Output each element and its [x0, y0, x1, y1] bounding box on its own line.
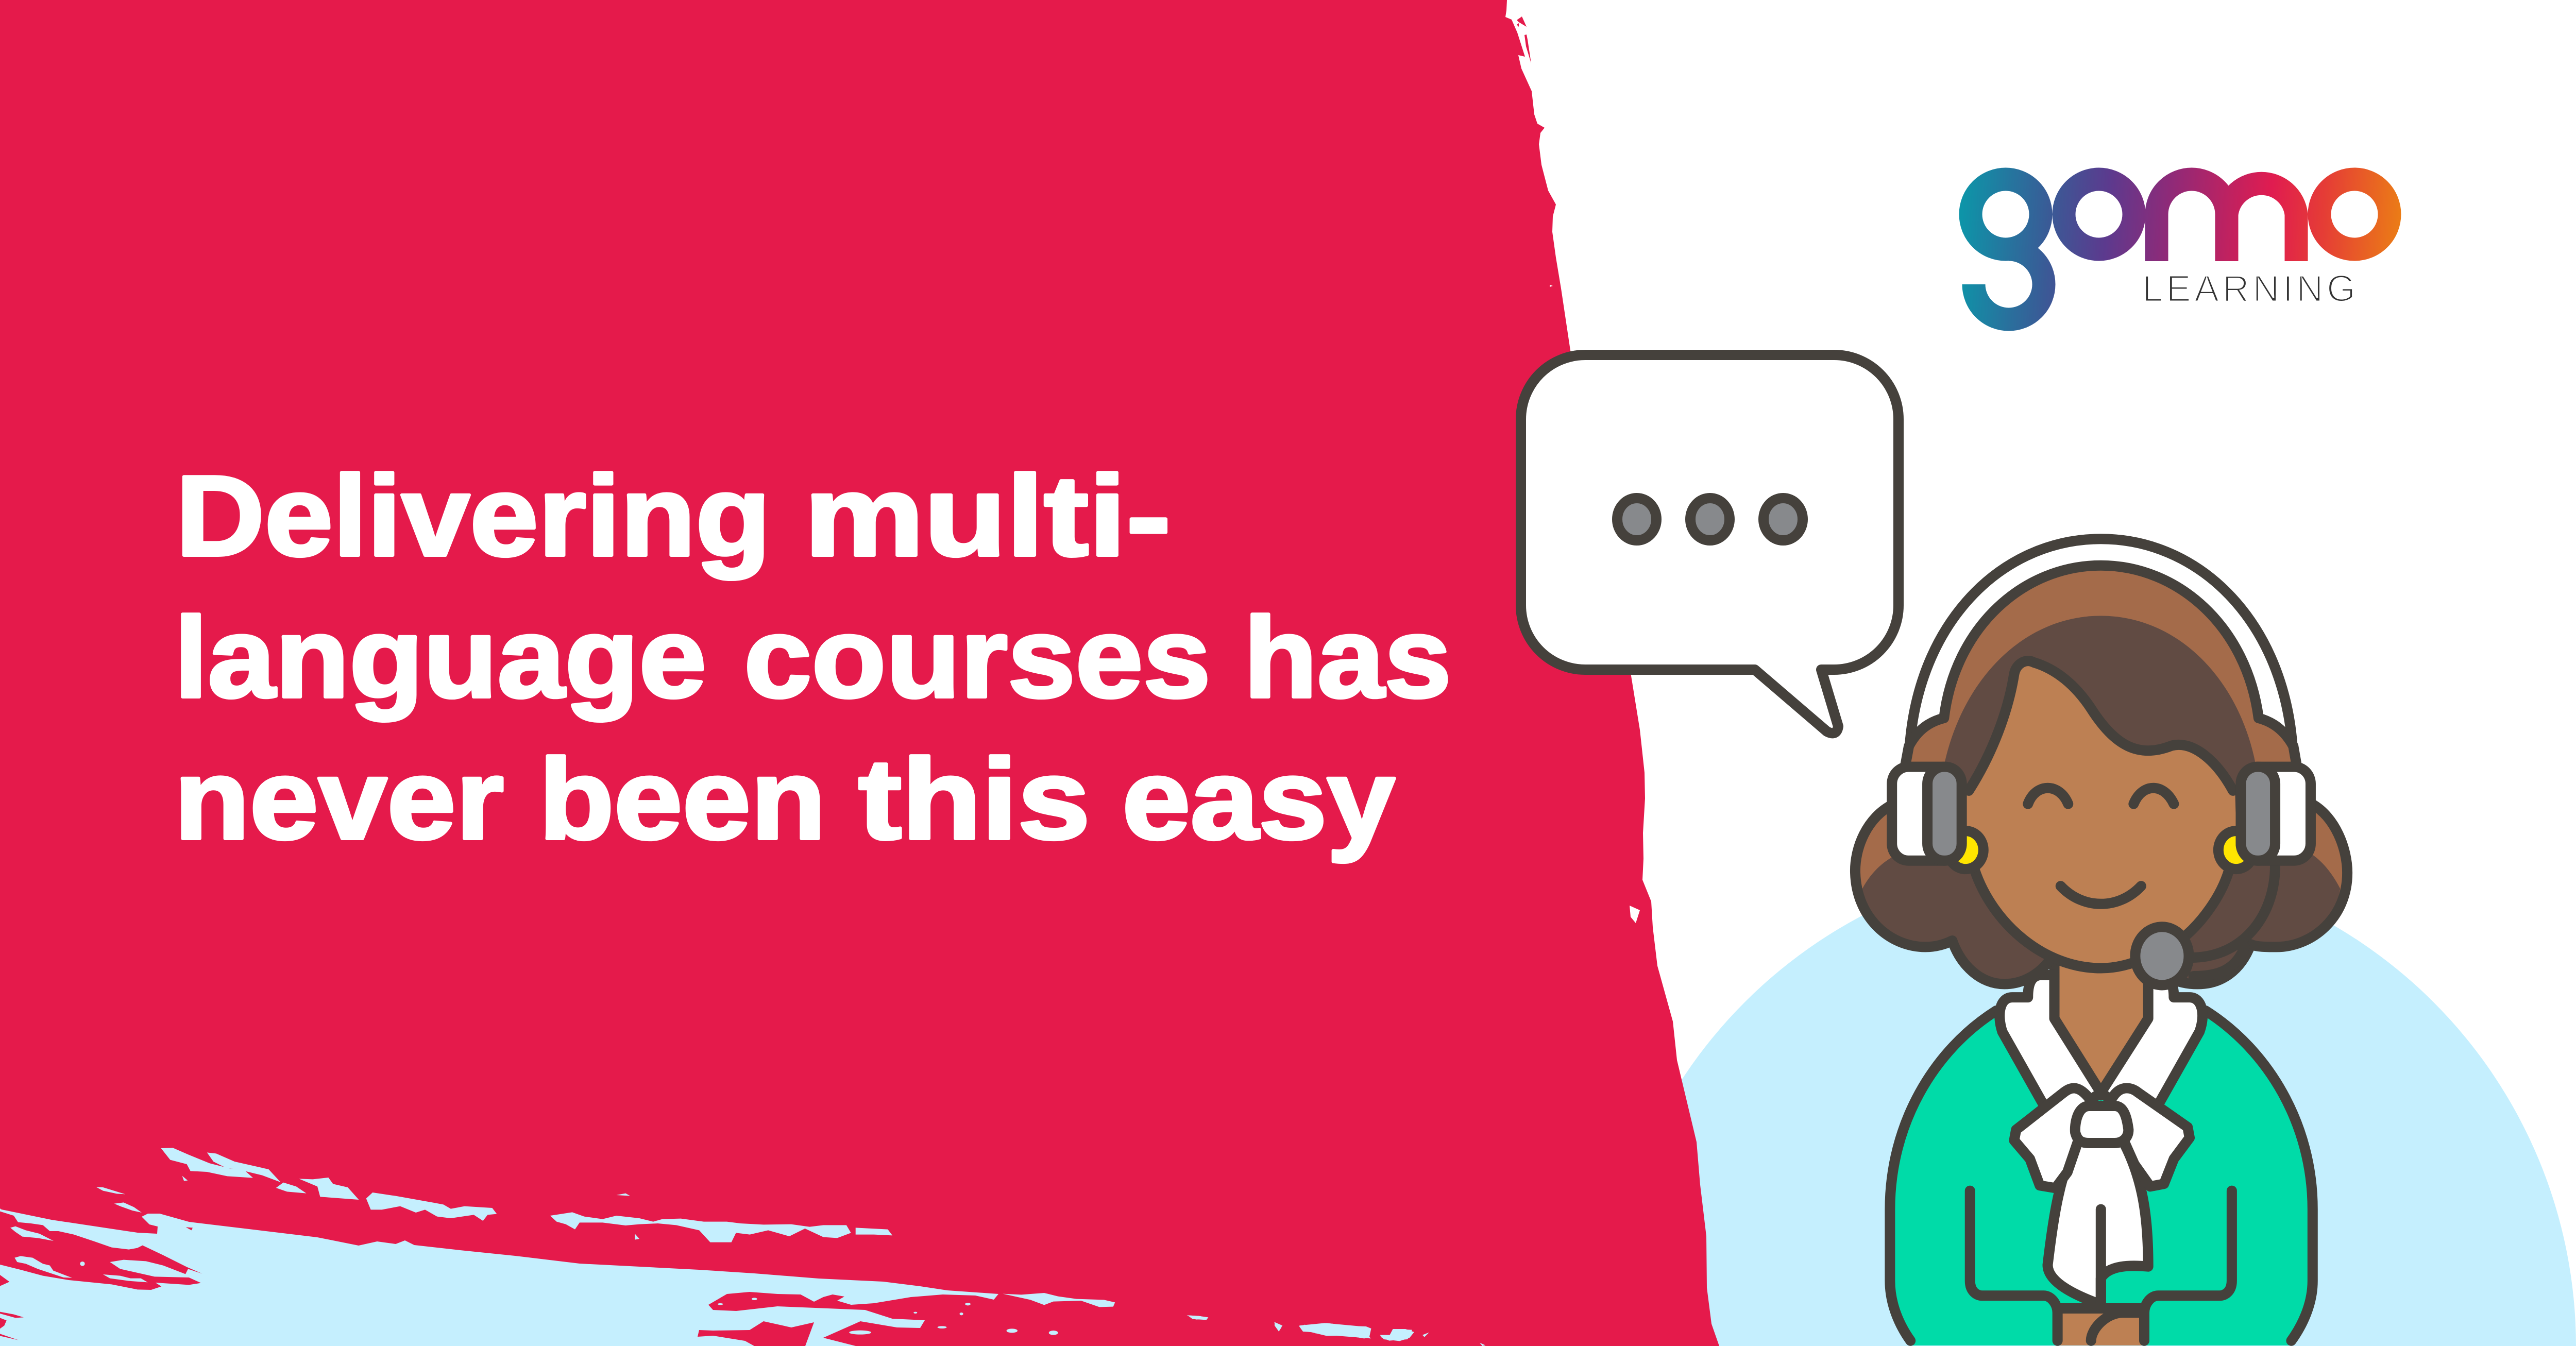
- headline: Delivering: [176, 452, 771, 580]
- tie centre line: [2096, 1209, 2106, 1305]
- headline: this: [858, 736, 1090, 863]
- hair back outline: [1855, 804, 2347, 984]
- dark front hair: [1943, 616, 2257, 812]
- headline: language: [174, 594, 706, 722]
- right bow: [2111, 1088, 2190, 1186]
- headset mic arm: [2192, 865, 2275, 976]
- white flecks in red panel: [1550, 285, 1640, 923]
- left collar: [1999, 975, 2101, 1109]
- gomo learning logo: [1971, 179, 2389, 319]
- right collar: [2101, 975, 2202, 1109]
- hair top: [1903, 566, 2299, 780]
- eyes: [2028, 788, 2174, 804]
- headline: easy: [1122, 736, 1395, 863]
- green jacket outline: [1890, 1011, 2313, 1341]
- neck: [2054, 960, 2148, 1095]
- dark lower hair: [1862, 854, 2340, 984]
- headline: [174, 452, 1451, 863]
- headline: been: [539, 736, 826, 863]
- green jacket fill: [1890, 1011, 2313, 1345]
- right earring: [2218, 831, 2254, 869]
- hair back silhouette: [1855, 804, 2347, 984]
- smile: [2061, 886, 2141, 904]
- bow knot: [2075, 1106, 2128, 1143]
- microphone: [2135, 927, 2189, 985]
- headline: has: [1244, 594, 1451, 722]
- gomo learning logo: LEARNING: [2142, 268, 2355, 310]
- left ear pad: [1927, 767, 1962, 861]
- headline: never: [174, 736, 504, 863]
- hand: [2058, 1308, 2144, 1345]
- face outline and hairline: [1969, 661, 2233, 968]
- speech bubble: [1521, 355, 1899, 733]
- headline: courses: [744, 594, 1211, 722]
- left ear cup: [1892, 767, 1961, 861]
- red brush panel: [0, 0, 1719, 1346]
- arms and hand outlines: [1970, 1191, 2232, 1341]
- blue paint splash, lower left: [0, 1148, 1485, 1346]
- left bow: [2014, 1088, 2091, 1188]
- call-centre woman character: [1855, 539, 2347, 1345]
- face: [1965, 661, 2237, 968]
- right ear pad: [2241, 767, 2275, 861]
- tie tail: [2047, 1138, 2148, 1305]
- left earring: [1948, 831, 1984, 869]
- light blue background circle: [1602, 859, 2576, 1346]
- headline: multi-: [804, 452, 1171, 580]
- headband: [1909, 539, 2293, 770]
- right ear cup: [2241, 767, 2311, 861]
